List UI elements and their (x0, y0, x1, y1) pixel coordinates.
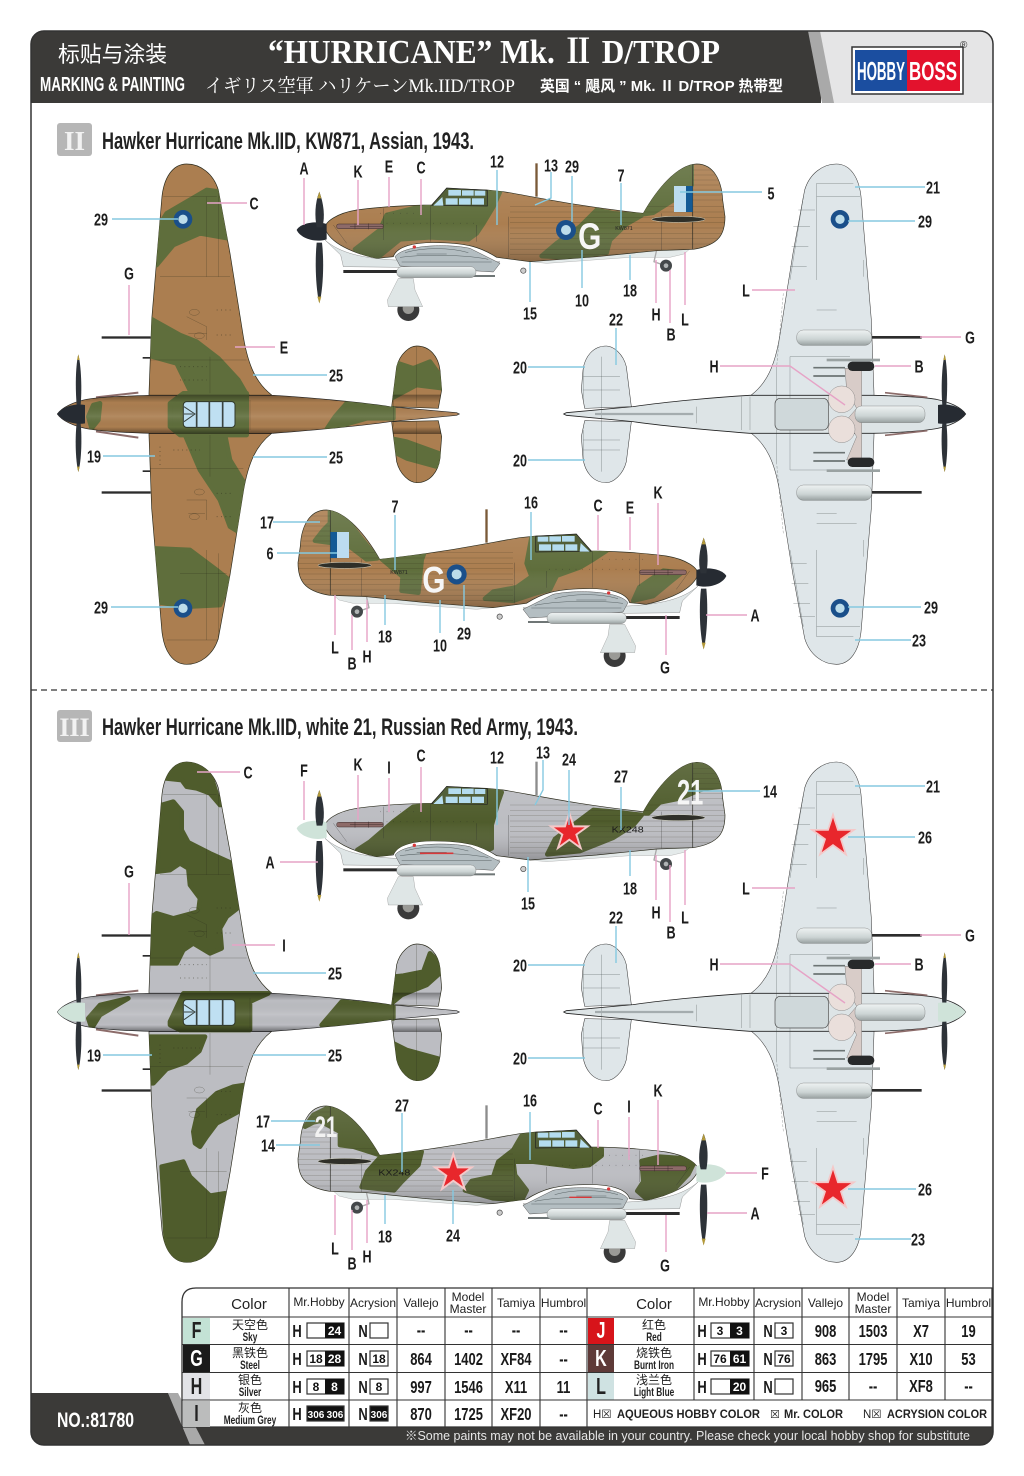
logo panel background (810, 31, 993, 103)
callouts: section III: B (347, 1254, 357, 1274)
callouts: section II: H (651, 305, 661, 325)
colour names: Red (646, 1332, 662, 1344)
callouts: section III: 22 (609, 908, 623, 928)
table headers: Model (857, 1290, 889, 1304)
callouts: section II: B (666, 325, 676, 345)
callouts: section II: 21 (926, 178, 940, 198)
Chinese subtitle: 英国 “ 飓风 ” Mk. Ⅱ D/TROP 热带型 (540, 78, 783, 95)
paint codes: X11 (505, 1378, 527, 1398)
callouts: section III: 14 (763, 782, 777, 802)
colour names: Steel (240, 1360, 260, 1372)
table headers: Master (855, 1302, 891, 1316)
paint codes: -- (869, 1377, 877, 1397)
Mr.Hobby and Acrysion codes: H (697, 1378, 707, 1398)
section III heading (57, 710, 578, 742)
callouts: section III: F (300, 761, 308, 781)
paint codes: XF8 (909, 1377, 933, 1397)
callouts: section II: 29 (924, 598, 938, 618)
colour names: Medium Grey (224, 1415, 277, 1427)
callouts: section II: 18 (378, 627, 392, 647)
callouts: section II: 7 (617, 166, 625, 186)
callouts: section III: F (761, 1164, 769, 1184)
swatch letters (190, 1318, 607, 1427)
section III heading: Hawker Hurricane Mk.IID, white 21, Russian Red Army, 1943. (102, 714, 578, 741)
callouts: section II: 5 (767, 184, 775, 204)
callouts: section II: 25 (329, 366, 343, 386)
Mr.Hobby and Acrysion codes: 28 (328, 1352, 341, 1366)
callouts: section II: B (347, 654, 357, 674)
Mr.Hobby and Acrysion codes: 76 (713, 1352, 727, 1366)
logo: Hobby Boss: BOSS (909, 56, 957, 86)
callouts: section III: 18 (378, 1227, 392, 1247)
callouts: section II: 6 (266, 544, 274, 564)
callouts: section II: G (965, 328, 975, 348)
marking and painting heading: MARKING & PAINTING (40, 74, 185, 96)
callouts: section II: 20 (513, 451, 527, 471)
callouts: section II: 23 (912, 631, 926, 651)
table headers: Mr.Hobby (293, 1295, 345, 1309)
callouts: section III: 17 (256, 1112, 270, 1132)
colour names: 红色 (642, 1316, 666, 1333)
callouts: section III: K (353, 755, 363, 775)
paint codes: XF20 (501, 1405, 532, 1425)
colour system legend: Mr. COLOR (784, 1409, 844, 1421)
colour swatches (183, 1318, 614, 1427)
aircraft: section II left side view (280, 160, 747, 321)
colour names (224, 1316, 675, 1427)
callouts: section III: I (387, 758, 391, 778)
paint codes: 997 (410, 1378, 432, 1398)
Mr.Hobby and Acrysion codes: 306 (308, 1410, 325, 1421)
callouts: section II: K (653, 483, 663, 503)
callouts: section III: 24 (562, 750, 576, 770)
Mr.Hobby and Acrysion codes: 18 (372, 1352, 386, 1366)
callouts: section III: 25 (328, 1046, 342, 1066)
paint codes: -- (964, 1377, 973, 1397)
callouts: section III: B (914, 955, 924, 975)
callouts: section II: 10 (433, 636, 447, 656)
colour names: Silver (239, 1387, 261, 1399)
swatch letters: I (194, 1401, 199, 1427)
Mr.Hobby and Acrysion codes: 3 (717, 1324, 724, 1338)
callouts: section II: 29 (457, 624, 471, 644)
paint codes: 1725 (454, 1405, 483, 1425)
Mr.Hobby and Acrysion codes: 8 (331, 1380, 338, 1394)
callouts: section II: 12 (490, 152, 504, 172)
paint codes: 863 (815, 1350, 837, 1370)
callouts: section III: I (627, 1097, 631, 1117)
callouts: section III: 27 (395, 1096, 409, 1116)
callouts: section III: 15 (521, 894, 535, 914)
header band (31, 31, 993, 103)
paint codes: 1503 (859, 1322, 888, 1342)
colour system legend: AQUEOUS HOBBY COLOR (617, 1409, 761, 1421)
callouts: section II: 29 (565, 157, 579, 177)
colour names: 灰色 (238, 1399, 262, 1416)
table headers: Humbrol (541, 1296, 586, 1310)
callouts: section III: H (362, 1247, 372, 1267)
colour names: Light Blue (634, 1387, 675, 1399)
logo: Hobby Boss: ® (960, 40, 968, 51)
swatch letters: H (191, 1374, 202, 1400)
callouts: section II: C (249, 194, 259, 214)
callouts: section III: I (282, 936, 286, 956)
callouts: section III: 18 (623, 879, 637, 899)
Mr.Hobby and Acrysion codes: H (292, 1350, 302, 1370)
section III heading: III (59, 713, 90, 742)
table headers: Vallejo (808, 1296, 843, 1310)
paint codes: 870 (410, 1405, 432, 1425)
Mr.Hobby and Acrysion codes: 306 (327, 1410, 344, 1421)
paint codes: 864 (410, 1350, 432, 1370)
callouts: section II: H (362, 647, 372, 667)
Mr.Hobby and Acrysion codes: 3 (736, 1324, 743, 1338)
table headers: Tamiya (497, 1296, 535, 1310)
main title: “HURRICANE” Mk. Ⅱ D/TROP (268, 34, 720, 71)
Mr.Hobby and Acrysion codes: H (292, 1322, 302, 1342)
callouts: section III (87, 743, 975, 1276)
callouts: section III: 24 (446, 1226, 460, 1246)
paint codes: 965 (815, 1377, 837, 1397)
callouts: section III: 12 (490, 748, 504, 768)
callouts: section II: 22 (609, 310, 623, 330)
Mr.Hobby and Acrysion codes: 61 (733, 1352, 746, 1366)
paint codes: XF84 (501, 1350, 532, 1370)
colour system legend: ☒ (770, 1409, 780, 1421)
logo: Hobby Boss (852, 40, 968, 94)
callouts: section II: B (914, 357, 924, 377)
table headers (231, 1290, 991, 1316)
callouts: section II: 19 (87, 447, 101, 467)
section II heading: II (64, 126, 85, 156)
Mr.Hobby and Acrysion codes: 8 (313, 1380, 320, 1394)
swatch letters: F (192, 1318, 201, 1344)
paint codes: 11 (557, 1378, 571, 1398)
swatch letters: L (596, 1374, 606, 1400)
colour names: 黑铁色 (232, 1344, 268, 1361)
paint codes: -- (559, 1350, 568, 1370)
callouts: section III: C (416, 746, 426, 766)
swatch letters: K (595, 1346, 607, 1372)
aircraft: section III left side view: 21 (677, 774, 703, 813)
paint codes: -- (559, 1321, 568, 1341)
callouts: section II: C (593, 496, 603, 516)
table headers: Color (636, 1296, 672, 1313)
callouts: section III: A (265, 853, 275, 873)
table headers: Model (452, 1290, 484, 1304)
callouts: section III: L (331, 1239, 339, 1259)
callouts: section II: 7 (391, 497, 399, 517)
callouts: section II: L (681, 310, 689, 330)
Mr.Hobby and Acrysion codes: H (697, 1350, 707, 1370)
callouts: section III: 20 (513, 956, 527, 976)
callouts: section III: C (243, 763, 253, 783)
callouts: section III: 25 (328, 964, 342, 984)
callouts: section III: 13 (536, 743, 550, 763)
table headers: Color (231, 1296, 267, 1313)
callouts: section II: H (709, 357, 719, 377)
Mr.Hobby and Acrysion codes: N (763, 1378, 773, 1398)
section divider (31, 689, 993, 691)
paint codes: X10 (909, 1350, 933, 1370)
colour names: 银色 (238, 1371, 262, 1388)
paint codes: -- (559, 1405, 568, 1425)
Japanese subtitle: イギリス空軍 ハリケーンMk.IID/TROP (205, 75, 515, 97)
callouts: section II: 15 (523, 304, 537, 324)
table headers: Humbrol (946, 1296, 991, 1310)
product number: NO.:81780 (57, 1409, 134, 1432)
callouts: section II: C (416, 158, 426, 178)
Mr.Hobby and Acrysion codes: 20 (733, 1380, 746, 1394)
callouts: section II: 29 (918, 212, 932, 232)
callouts: section III: G (124, 862, 134, 882)
title block (40, 34, 783, 97)
Mr.Hobby and Acrysion codes: H (292, 1405, 302, 1425)
paint codes: -- (512, 1321, 520, 1341)
callouts: section II: 17 (260, 513, 274, 533)
aircraft: section II bottom view (564, 164, 966, 664)
Mr.Hobby and Acrysion codes: N (358, 1350, 368, 1370)
colour system legend: N☒ (863, 1409, 882, 1421)
callouts: section II: 13 (544, 156, 558, 176)
callouts: section II: G (124, 264, 134, 284)
callouts: section II: 16 (524, 493, 538, 513)
callouts: section II: 18 (623, 281, 637, 301)
callouts: section III: L (681, 908, 689, 928)
callouts: section II: L (331, 638, 339, 658)
colour system legend: ACRYSION COLOR (887, 1409, 988, 1421)
callouts: section III: G (965, 926, 975, 946)
callouts: section II: E (280, 338, 288, 358)
callouts: section II: 29 (94, 210, 108, 230)
paint codes: -- (417, 1321, 425, 1341)
Mr.Hobby and Acrysion codes: 24 (328, 1324, 341, 1338)
footer note: ※Some paints may not be available in your country. Please check your local hobby shop for substitute (405, 1429, 970, 1443)
aircraft: section III right side view (276, 1102, 743, 1263)
colour system legend: H☒ (593, 1409, 612, 1421)
callouts: section III: 14 (261, 1136, 275, 1156)
aircraft: section III right side view: KX248 (378, 1168, 411, 1178)
Mr.Hobby and Acrysion codes: H (697, 1322, 707, 1342)
table headers: Acrysion (350, 1296, 396, 1310)
callouts: section III: G (660, 1256, 670, 1276)
callouts: section II: A (750, 606, 760, 626)
logo: Hobby Boss: HOBBY (857, 56, 905, 86)
callouts: section II: L (742, 281, 750, 301)
callouts: section III: 23 (911, 1230, 925, 1250)
table headers: Acrysion (755, 1296, 801, 1310)
Mr.Hobby and Acrysion codes: N (763, 1350, 773, 1370)
aircraft: section III bottom view (564, 762, 966, 1262)
Chinese heading: 标贴与涂装 (58, 37, 167, 69)
table headers: Vallejo (403, 1296, 439, 1310)
colour names: Burnt Iron (634, 1360, 674, 1372)
Mr.Hobby and Acrysion codes: 8 (376, 1380, 383, 1394)
Mr.Hobby and Acrysion codes: 3 (781, 1324, 788, 1338)
paint codes: 1795 (859, 1350, 888, 1370)
aircraft: section III left side view: KX248 (612, 824, 644, 834)
paint codes: 1402 (454, 1350, 483, 1370)
paint codes: 19 (961, 1322, 976, 1342)
colour names: Sky (243, 1332, 258, 1344)
table headers: Master (450, 1302, 486, 1316)
callouts: section II: K (353, 162, 363, 182)
aircraft: section III top view (57, 762, 461, 1265)
aircraft: section II right side view: KW871 (390, 570, 408, 576)
paint colour table (182, 1288, 992, 1427)
aircraft: section II right side view: G (422, 560, 445, 602)
Mr.Hobby and Acrysion codes: 306 (371, 1410, 388, 1421)
callouts: section III: H (709, 955, 719, 975)
swatch letters: G (190, 1346, 203, 1372)
callouts: section III: 26 (918, 828, 932, 848)
callouts: section III: 27 (614, 767, 628, 787)
callouts: section II: 29 (94, 598, 108, 618)
callouts: section II: 10 (575, 291, 589, 311)
callouts: section III: A (750, 1204, 760, 1224)
colour names: 浅兰色 (636, 1371, 672, 1388)
paint codes: 1546 (454, 1378, 483, 1398)
table headers: Mr.Hobby (698, 1295, 750, 1309)
paint codes: X7 (913, 1322, 929, 1342)
colour names: 烧铁色 (636, 1344, 672, 1361)
callouts: section III: 20 (513, 1049, 527, 1069)
paint codes: 908 (815, 1322, 837, 1342)
colour system legend (593, 1409, 988, 1421)
callouts: section II: E (385, 157, 393, 177)
callouts: section III: C (593, 1099, 603, 1119)
callouts: section II: 20 (513, 358, 527, 378)
callouts: section II: A (299, 159, 309, 179)
aircraft: section II right side view (276, 506, 743, 667)
swatch letters: J (597, 1318, 605, 1344)
Mr.Hobby and Acrysion codes: N (763, 1322, 773, 1342)
paint codes: -- (464, 1321, 473, 1341)
callouts: section III: 21 (926, 777, 940, 797)
callouts: section II: E (626, 498, 634, 518)
callouts: section III: B (666, 923, 676, 943)
section II heading: Hawker Hurricane Mk.IID, KW871, Assian, 1943. (102, 128, 474, 155)
aircraft: section II left side view: KW871 (615, 226, 633, 232)
callouts: section III: 26 (918, 1180, 932, 1200)
table headers: Tamiya (902, 1296, 940, 1310)
header slant stripe (808, 31, 834, 103)
callouts: section II (87, 152, 975, 678)
aircraft: section III right side view: 21 (315, 1111, 337, 1144)
Mr.Hobby and Acrysion codes (292, 1322, 793, 1425)
callouts: section II: G (660, 658, 670, 678)
Mr.Hobby and Acrysion codes: N (358, 1378, 368, 1398)
callouts: section III: 16 (523, 1091, 537, 1111)
Mr.Hobby and Acrysion codes: H (292, 1378, 302, 1398)
paint codes: 53 (961, 1350, 976, 1370)
callouts: section II: 25 (329, 448, 343, 468)
Mr.Hobby and Acrysion codes: 76 (777, 1352, 791, 1366)
section II heading (57, 123, 474, 156)
aircraft: section III left side view (280, 758, 747, 919)
footer band and product number (31, 1393, 993, 1445)
callouts: section III: L (742, 879, 750, 899)
callouts: section III: 19 (87, 1046, 101, 1066)
aircraft: section II top view (57, 164, 461, 664)
Mr.Hobby and Acrysion codes: N (358, 1405, 368, 1425)
Mr.Hobby and Acrysion codes: 18 (309, 1352, 323, 1366)
callouts: section III: K (653, 1081, 663, 1101)
colour names: 天空色 (232, 1316, 268, 1333)
aircraft: section II left side view: G (578, 216, 601, 258)
paint codes (410, 1321, 976, 1425)
callouts: section III: H (651, 903, 661, 923)
Mr.Hobby and Acrysion codes: N (358, 1322, 368, 1342)
